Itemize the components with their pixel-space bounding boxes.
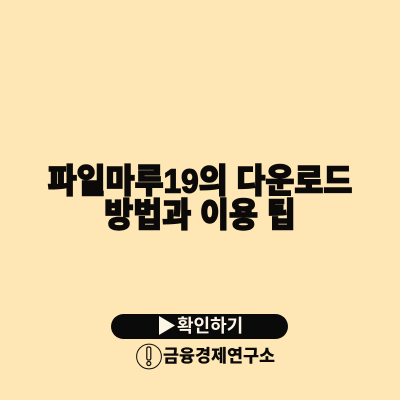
brand name: 금융경제연구소 [163,346,275,366]
title [48,162,352,234]
title: 방법과 이용 팁 [104,196,296,234]
button: confirm [111,314,288,339]
title: 파일마루19의 다운로드 [48,162,352,200]
button label: 확인하기 [177,316,243,336]
icon: play triangle [159,316,175,335]
brand row [136,344,275,370]
icon: exclamation circle [136,344,162,370]
